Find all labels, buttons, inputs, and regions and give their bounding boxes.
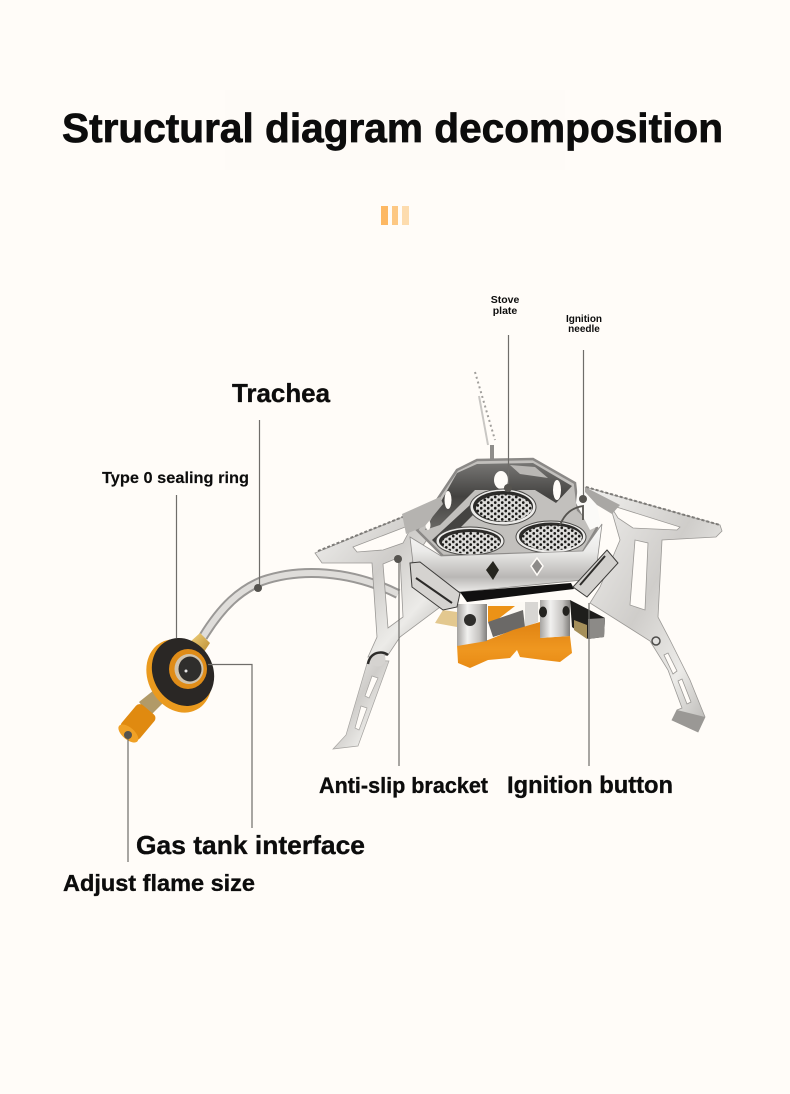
stove illustration	[203, 372, 722, 749]
callout leader lines	[128, 335, 589, 862]
label: ignition button: Ignition button	[507, 772, 673, 799]
front panel	[410, 524, 602, 592]
bracket ends over bowl	[402, 497, 443, 534]
orange burner base	[457, 622, 572, 668]
title: Structural diagram decomposition	[62, 105, 723, 151]
ignition needle wire	[560, 506, 583, 525]
flame adjust knob	[115, 702, 157, 746]
label: stove plate	[491, 294, 519, 317]
label: anti-slip bracket: Anti-slip bracket	[319, 773, 489, 798]
label: ignition needle: Ignition	[566, 314, 602, 325]
threaded port	[169, 649, 207, 689]
back bracket	[475, 372, 495, 460]
callout anchor dots	[124, 484, 587, 739]
orange flange	[134, 628, 224, 724]
burner centre parts	[488, 602, 540, 640]
bowl interior	[417, 459, 597, 556]
left leg	[333, 660, 389, 749]
label: trachea: Trachea	[232, 378, 331, 408]
ignition box	[570, 600, 605, 639]
folding frame	[460, 583, 574, 602]
gas tank connector	[115, 627, 226, 746]
label: ignition needle: needle	[568, 324, 600, 335]
right bracket	[585, 487, 722, 732]
label: adjust flame size: Adjust flame size	[63, 870, 255, 896]
left bracket	[315, 508, 447, 657]
label: stove plate: plate	[493, 305, 517, 317]
label: stove plate: Stove	[491, 294, 519, 306]
brass fitting behind burner	[435, 610, 457, 627]
air hose	[203, 573, 398, 637]
label: type 0 sealing ring: Type 0 sealing ring	[102, 470, 249, 487]
burner pillars	[457, 600, 570, 646]
title	[62, 90, 723, 170]
three burner heads	[436, 489, 586, 555]
black seal ring	[140, 627, 226, 717]
title accent bars	[381, 206, 409, 225]
label: gas tank interface: Gas tank interface	[136, 830, 365, 860]
label: ignition needle	[566, 314, 602, 335]
